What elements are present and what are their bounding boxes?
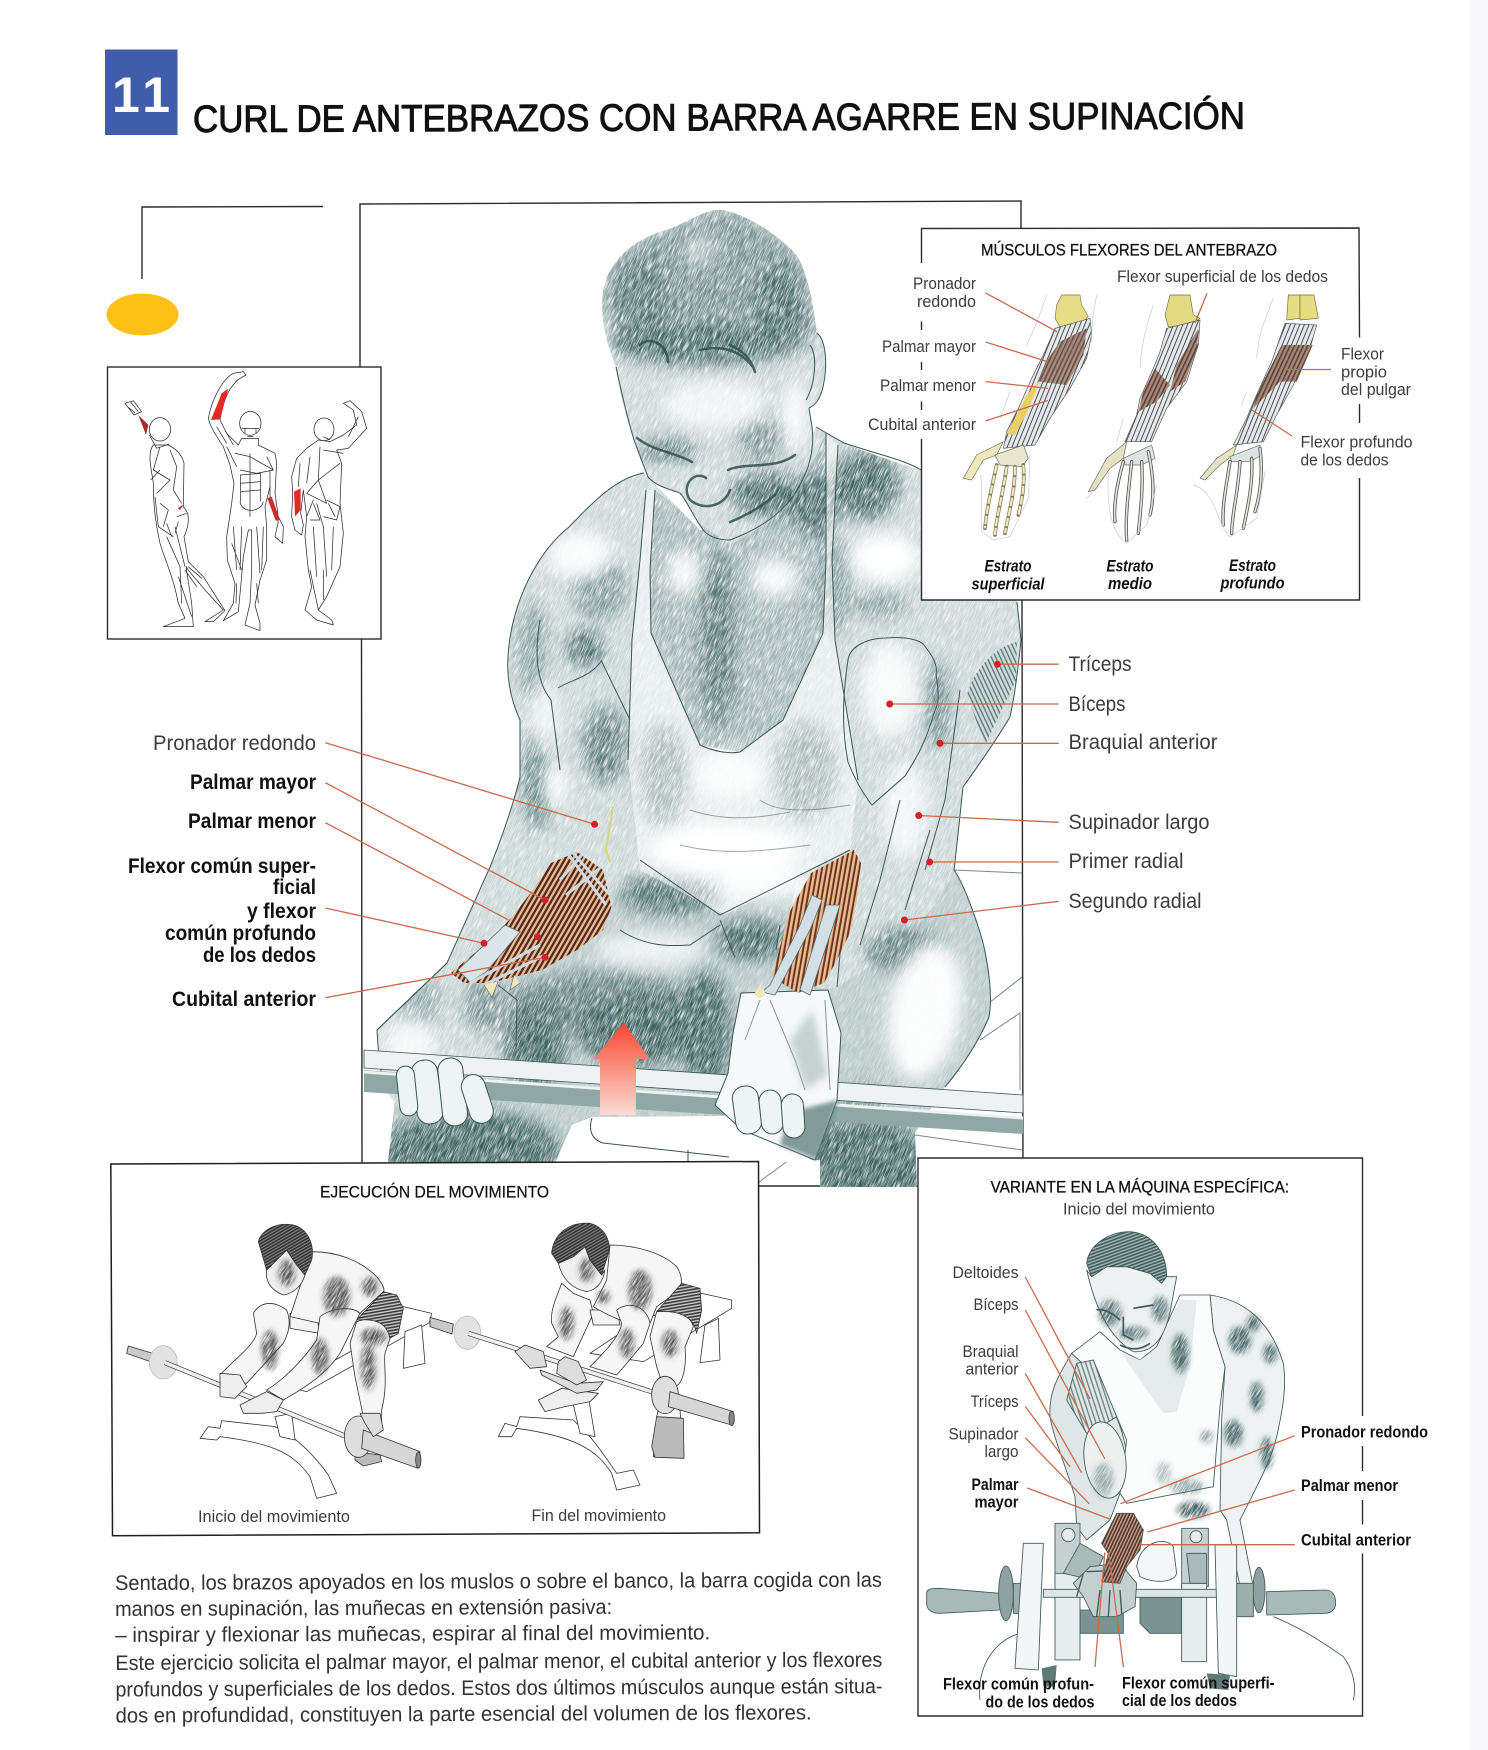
barbell	[127, 1346, 155, 1363]
highlighted patch: side hip	[178, 504, 184, 510]
description text: dos en profundidad, constituyen la parte esencial del volumen de los flexores.	[115, 1701, 812, 1727]
triceps stripes	[967, 642, 1017, 745]
chest	[590, 1310, 620, 1325]
arm triceps stripes	[1067, 1360, 1117, 1433]
bench base	[200, 1421, 337, 1498]
title: CURL DE ANTEBRAZOS CON BARRA AGARRE EN SUPINACIÓN	[193, 95, 1245, 141]
bench seat	[287, 1307, 432, 1392]
tank top	[1072, 1295, 1225, 1503]
left muscle labels	[128, 732, 316, 1011]
description text: profundos y superficiales de los dedos. Estos dos últimos músculos aunque están situa-	[115, 1675, 882, 1701]
caption: end: Fin del movimiento	[532, 1506, 666, 1525]
panel: machine variant	[918, 1158, 1428, 1716]
layer captions: medio	[1108, 574, 1152, 593]
left labels: Bíceps	[974, 1295, 1018, 1314]
panel title: EJECUCIÓN DEL MOVIMIENTO	[320, 1182, 549, 1202]
dissected forearm	[1102, 1513, 1143, 1583]
left labels	[948, 1263, 1019, 1512]
left hand outline	[377, 963, 517, 1090]
layer captions	[972, 556, 1284, 594]
description text: Sentado, los brazos apoyados en los muslos o sobre el banco, la barra cogida con las	[115, 1569, 882, 1595]
red movement arrow	[594, 1023, 650, 1115]
left muscle labels: Pronador redondo	[153, 732, 316, 755]
page background edge	[1470, 0, 1488, 1750]
bottom labels: do de los dedos	[986, 1692, 1094, 1712]
main leader lines	[325, 664, 1059, 998]
right hand	[715, 990, 841, 1160]
layer captions: Estrato	[984, 556, 1032, 576]
face	[558, 1247, 605, 1292]
figure: end of movement	[430, 1206, 734, 1490]
left labels: Deltoides	[952, 1263, 1018, 1282]
left arm	[1050, 1353, 1127, 1540]
right labels: Flexor profundo	[1300, 432, 1412, 452]
left labels	[868, 274, 976, 434]
pencil shading	[378, 210, 1020, 1187]
yellow marker ellipse	[106, 294, 178, 336]
description text: Este ejercicio solicita el palmar mayor, el palmar menor, el cubital anterior y los flexores	[115, 1649, 882, 1675]
center dark blocks	[1080, 1597, 1182, 1633]
bar ends	[927, 1588, 1000, 1613]
left muscle labels: ficial	[273, 876, 316, 899]
panel: movement execution	[111, 1162, 760, 1536]
right labels: propio	[1341, 362, 1387, 382]
chest	[290, 1313, 320, 1333]
panel: target muscles mini anatomy	[108, 367, 381, 639]
barbell	[430, 1317, 453, 1334]
anchor dots	[480, 661, 1001, 961]
right labels: Palmar menor	[1301, 1476, 1398, 1495]
left muscle labels: común profundo	[165, 922, 316, 945]
hand on bar	[1073, 1563, 1137, 1617]
face details	[1097, 1305, 1153, 1349]
near arm	[590, 1305, 650, 1375]
far arm	[547, 1283, 593, 1357]
highlighted forearm: front lowered	[267, 497, 280, 521]
left labels: largo	[984, 1442, 1018, 1461]
bench seat	[590, 1293, 732, 1362]
left hand fingers	[396, 1057, 496, 1127]
barbell	[364, 1050, 1023, 1134]
right muscle labels: Segundo radial	[1068, 890, 1202, 913]
bottom labels: Flexor común profun-	[943, 1674, 1094, 1694]
seat pad	[1137, 1541, 1177, 1581]
hair	[258, 1224, 312, 1275]
left muscle labels: Palmar menor	[188, 810, 316, 833]
highlighted forearm: side view	[138, 415, 148, 435]
biceps	[1079, 1419, 1131, 1501]
left muscle labels: Flexor común super-	[128, 855, 316, 878]
machine frames	[1055, 1523, 1208, 1587]
highlighted forearm: back view	[294, 488, 301, 517]
left labels: Braquial	[962, 1342, 1018, 1361]
body outlines	[377, 333, 1021, 1087]
foot	[355, 1452, 382, 1466]
arm: superficial layer	[963, 295, 1097, 540]
bottom labels: Flexor común superfi-	[1122, 1674, 1274, 1692]
head	[1087, 1267, 1177, 1352]
right labels	[1117, 267, 1412, 470]
figure: start of movement	[127, 1206, 443, 1498]
right labels: de los dedos	[1300, 450, 1388, 470]
near arm	[267, 1309, 360, 1400]
right hand fingers	[731, 1084, 806, 1139]
left labels: Supinador	[948, 1424, 1019, 1444]
shading	[516, 1206, 722, 1410]
main figure frame	[360, 201, 1023, 1186]
leg	[650, 1311, 693, 1457]
figure: front view	[208, 372, 283, 631]
main illustration: seated forearm curl	[153, 210, 1024, 1187]
right labels	[1301, 1422, 1428, 1550]
panel title: MÚSCULOS FLEXORES DEL ANTEBRAZO	[981, 240, 1277, 260]
background bench lines	[759, 870, 1022, 1182]
left labels: Palmar menor	[880, 376, 976, 395]
left muscle labels: Palmar mayor	[190, 771, 316, 794]
right labels: Cubital anterior	[1301, 1530, 1411, 1550]
layer captions: Estrato	[1106, 556, 1154, 576]
right labels: Flexor	[1341, 344, 1384, 364]
leg	[350, 1319, 390, 1430]
right muscle labels: Braquial anterior	[1068, 731, 1218, 754]
number badge: 11	[112, 67, 170, 123]
leader lines	[986, 293, 1331, 436]
leader lines	[1025, 1277, 1295, 1667]
shading	[205, 1206, 443, 1444]
right labels: Pronador redondo	[1301, 1422, 1428, 1442]
left labels: redondo	[917, 292, 976, 311]
number badge	[105, 50, 178, 135]
right hand shading	[745, 1000, 838, 1160]
description text	[115, 1569, 883, 1727]
panel: forearm flexor muscles	[868, 228, 1412, 600]
grip	[540, 1370, 603, 1393]
left labels: Palmar	[972, 1475, 1019, 1494]
hair	[552, 1223, 609, 1275]
arm: middle layer	[1087, 295, 1200, 543]
dissected right forearm muscles	[755, 850, 861, 998]
dissected left forearm muscles	[451, 807, 613, 997]
bottom labels	[943, 1674, 1274, 1712]
torso	[290, 1252, 384, 1325]
left muscle labels: de los dedos	[203, 944, 316, 967]
corner bracket	[142, 206, 323, 279]
right muscle labels	[1068, 653, 1218, 913]
panel subtitle: Inicio del movimiento	[1063, 1200, 1215, 1218]
left labels: Palmar mayor	[882, 337, 976, 356]
left muscle labels: y flexor	[247, 900, 316, 923]
hands	[220, 1373, 247, 1398]
figure: side view	[125, 401, 225, 627]
right muscle labels: Bíceps	[1068, 693, 1126, 716]
hands	[515, 1345, 547, 1368]
face shading	[1080, 1266, 1187, 1370]
left labels: mayor	[974, 1492, 1019, 1512]
torso	[593, 1245, 681, 1324]
chest	[1120, 1300, 1197, 1413]
bottom labels: cial de los dedos	[1122, 1691, 1237, 1710]
face details	[637, 341, 795, 522]
left labels: Pronador	[913, 274, 976, 293]
left labels: anterior	[966, 1360, 1019, 1378]
left labels: Cubital anterior	[868, 415, 976, 434]
description text: manos en supinación, las muñecas en extensión pasiva:	[115, 1596, 612, 1621]
description text: – inspirar y flexionar las muñecas, espirar al final del movimiento.	[115, 1621, 710, 1647]
right labels: Flexor superficial de los dedos	[1117, 267, 1328, 286]
right labels: del pulgar	[1341, 380, 1411, 399]
right muscle labels: Supinador largo	[1068, 811, 1210, 834]
layer captions: Estrato	[1229, 556, 1276, 575]
shading	[1005, 1236, 1365, 1598]
right muscle labels: Tríceps	[1068, 653, 1132, 676]
shorts	[657, 1283, 702, 1333]
face	[266, 1250, 305, 1295]
highlighted forearm: front raised	[211, 388, 228, 420]
right arm and shoulder	[1210, 1295, 1285, 1587]
left labels: Tríceps	[970, 1392, 1018, 1411]
bench base	[498, 1417, 640, 1490]
shorts	[357, 1292, 403, 1338]
body base shapes	[377, 210, 1021, 1187]
far arm	[220, 1303, 289, 1383]
left muscle labels: Cubital anterior	[172, 988, 316, 1011]
caption: start: Inicio del movimiento	[198, 1507, 350, 1526]
machine plates	[1015, 1543, 1043, 1670]
right muscle labels: Primer radial	[1068, 850, 1184, 873]
panel title: VARIANTE EN LA MÁQUINA ESPECÍFICA:	[990, 1178, 1289, 1196]
arm: deep layer	[1193, 295, 1318, 537]
layer captions: superficial	[972, 574, 1046, 594]
floor arcs	[980, 1617, 1355, 1700]
figure: back view	[292, 401, 367, 625]
hair	[1087, 1232, 1167, 1283]
layer captions: profundo	[1220, 574, 1284, 592]
far foot	[538, 1388, 598, 1412]
white bench seat	[555, 1116, 820, 1163]
